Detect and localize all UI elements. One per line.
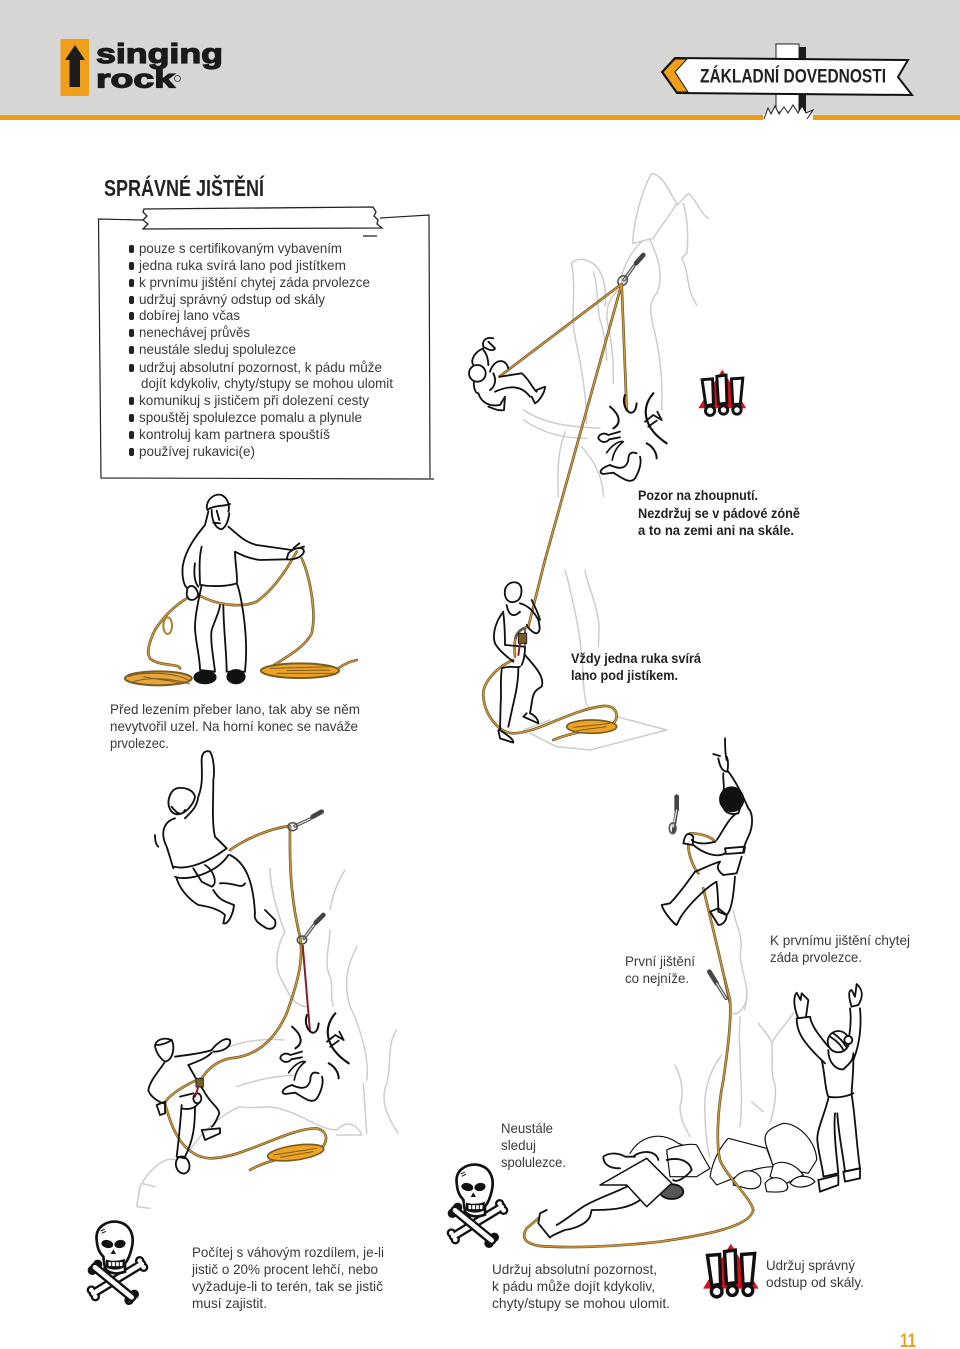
checklist text: dojít kdykoliv, chyty/stupy se mohou ulomit bbox=[141, 375, 393, 391]
illustration: hard catch with leader above belayer bbox=[137, 751, 398, 1208]
checklist text bbox=[138, 240, 393, 459]
caption: keep distance bbox=[766, 1257, 864, 1290]
caption: stay attentive bbox=[492, 1261, 670, 1311]
illustration: leader clipping first protection bbox=[662, 738, 752, 1010]
caption: swing warning: Pozor na zhoupnutí. bbox=[638, 487, 758, 503]
caption: weight difference: musí zajistit. bbox=[192, 1295, 267, 1311]
caption: weight difference: jistič o 20% procent lehčí, nebo bbox=[191, 1261, 378, 1277]
checklist text: neustále sleduj spolulezce bbox=[139, 341, 296, 357]
caption: swing warning bbox=[638, 487, 800, 538]
rope to falling climber and belayer bbox=[499, 284, 627, 560]
rope in climber's hand bbox=[688, 833, 730, 1003]
quickdraw bbox=[616, 255, 643, 288]
caption: keep distance: Udržuj správný bbox=[766, 1257, 855, 1273]
icon: skull and crossbones bbox=[87, 1222, 148, 1305]
bullets bbox=[129, 245, 134, 456]
caption: stay attentive: Udržuj absolutní pozornost, bbox=[492, 1261, 657, 1277]
caption: swing warning: Nezdržuj se v pádové zóně bbox=[638, 505, 800, 521]
leader figure bbox=[155, 751, 275, 929]
caption: watch your partner: spolulezce. bbox=[501, 1154, 566, 1170]
climber figure bbox=[662, 738, 752, 925]
checklist text: komunikuj s jističem při dolezení cesty bbox=[139, 392, 369, 408]
caption: one hand on rope bbox=[571, 650, 701, 683]
caption: weight difference bbox=[191, 1244, 384, 1311]
checklist text: nenechávej průvěs bbox=[139, 324, 250, 340]
impact burst bbox=[598, 393, 667, 481]
caption: one hand on rope: lano pod jistíkem. bbox=[571, 667, 678, 683]
caption: keep distance: odstup od skály. bbox=[766, 1274, 864, 1290]
logo: singing rock bbox=[60, 38, 223, 96]
illustration: swing fall against rock bbox=[469, 173, 708, 560]
checklist text: používej rukavici(e) bbox=[139, 443, 255, 459]
rock outline bbox=[733, 910, 747, 1010]
caption: flake the rope: Před lezením přeber lano, tak aby se něm bbox=[110, 701, 360, 717]
caption: flake the rope: prvolezec. bbox=[110, 735, 169, 751]
signpost: základní dovednosti bbox=[662, 44, 912, 121]
checklist text: kontroluj kam partnera spouštíš bbox=[139, 426, 330, 442]
spotter figure bbox=[794, 984, 862, 1192]
checklist text: spouštěj spolulezce pomalu a plynule bbox=[139, 409, 362, 425]
boulders bbox=[630, 1123, 817, 1192]
tape strip bbox=[143, 207, 382, 229]
quickdraws bbox=[669, 797, 726, 998]
rock face outline bbox=[523, 173, 708, 497]
caption: first protection low: První jištění bbox=[625, 953, 695, 969]
caption: spot the leader bbox=[770, 932, 910, 965]
icon: skull and crossbones, second bbox=[447, 1165, 508, 1248]
checklist text: jedna ruka svírá lano pod jistítkem bbox=[138, 257, 346, 273]
rock and ground lines bbox=[523, 570, 667, 750]
rope with coil bbox=[165, 826, 326, 1170]
quickdraws bbox=[288, 812, 323, 944]
rock and ground lines bbox=[137, 868, 398, 1208]
note frame bbox=[98, 215, 434, 479]
rock outline bbox=[675, 993, 793, 1157]
checklist text: k prvnímu jištění chytej záda prvolezce bbox=[139, 274, 370, 290]
caption: weight difference: Počítej s váhovým rozdílem, je-li bbox=[192, 1244, 384, 1260]
rope to lying belayer bbox=[524, 980, 753, 1247]
caption: one hand on rope: Vždy jedna ruka svírá bbox=[571, 650, 701, 666]
signpost: základní dovednosti: ZÁKLADNÍ DOVEDNOSTI bbox=[700, 66, 886, 88]
impact burst, second climber bbox=[280, 1013, 349, 1101]
checklist text: pouze s certifikovaným vybavením bbox=[139, 240, 342, 256]
illustration: belayer woman with device bbox=[483, 560, 667, 750]
icon: warning exclamation marks, second bbox=[703, 1244, 759, 1297]
caption: watch your partner bbox=[501, 1120, 566, 1170]
checklist text: dobírej lano včas bbox=[139, 307, 240, 323]
caption: stay attentive: k pádu může dojít kdykoliv, bbox=[492, 1278, 655, 1294]
illustration: man flaking the rope bbox=[125, 495, 357, 685]
caption: flake the rope: nevytvořil uzel. Na horní konec se naváže bbox=[110, 718, 358, 734]
falling climber bbox=[469, 338, 545, 410]
rope piles and strand bbox=[125, 552, 357, 685]
header band bbox=[0, 0, 960, 120]
caption: weight difference: vyžaduje-li to terén, tak se jistič bbox=[192, 1278, 383, 1294]
illustration: spotter and inattentive belayer bbox=[524, 980, 862, 1247]
caption: watch your partner: Neustále bbox=[501, 1120, 553, 1136]
caption: stay attentive: chyty/stupy se mohou ulomit. bbox=[492, 1295, 670, 1311]
caption: first protection low bbox=[625, 953, 695, 986]
man figure bbox=[182, 495, 304, 683]
caption: watch your partner: sleduj bbox=[501, 1137, 536, 1153]
icon: warning exclamation marks bbox=[698, 370, 746, 415]
woman figure bbox=[494, 582, 542, 743]
caption: spot the leader: K prvnímu jištění chytej bbox=[770, 932, 910, 948]
logo: singing rock: rock bbox=[96, 64, 176, 94]
caption: swing warning: a to na zemi ani na skále. bbox=[638, 522, 794, 538]
heading: správné jištění: SPRÁVNÉ JIŠTĚNÍ bbox=[104, 174, 264, 201]
checklist text: udržuj absolutní pozornost, k pádu může bbox=[139, 359, 382, 375]
belay rope bbox=[483, 560, 617, 740]
logo: singing rock: singing bbox=[96, 38, 223, 69]
red rope section bbox=[303, 945, 310, 1032]
lying belayer reading bbox=[538, 1152, 692, 1238]
caption: first protection low: co nejníže. bbox=[625, 970, 689, 986]
panel: checklist note bbox=[98, 207, 434, 479]
belayer man figure bbox=[148, 1039, 230, 1175]
caption: flake the rope bbox=[110, 701, 360, 751]
checklist text: udržuj správný odstup od skály bbox=[139, 291, 325, 307]
caption: spot the leader: záda prvolezce. bbox=[770, 949, 862, 965]
